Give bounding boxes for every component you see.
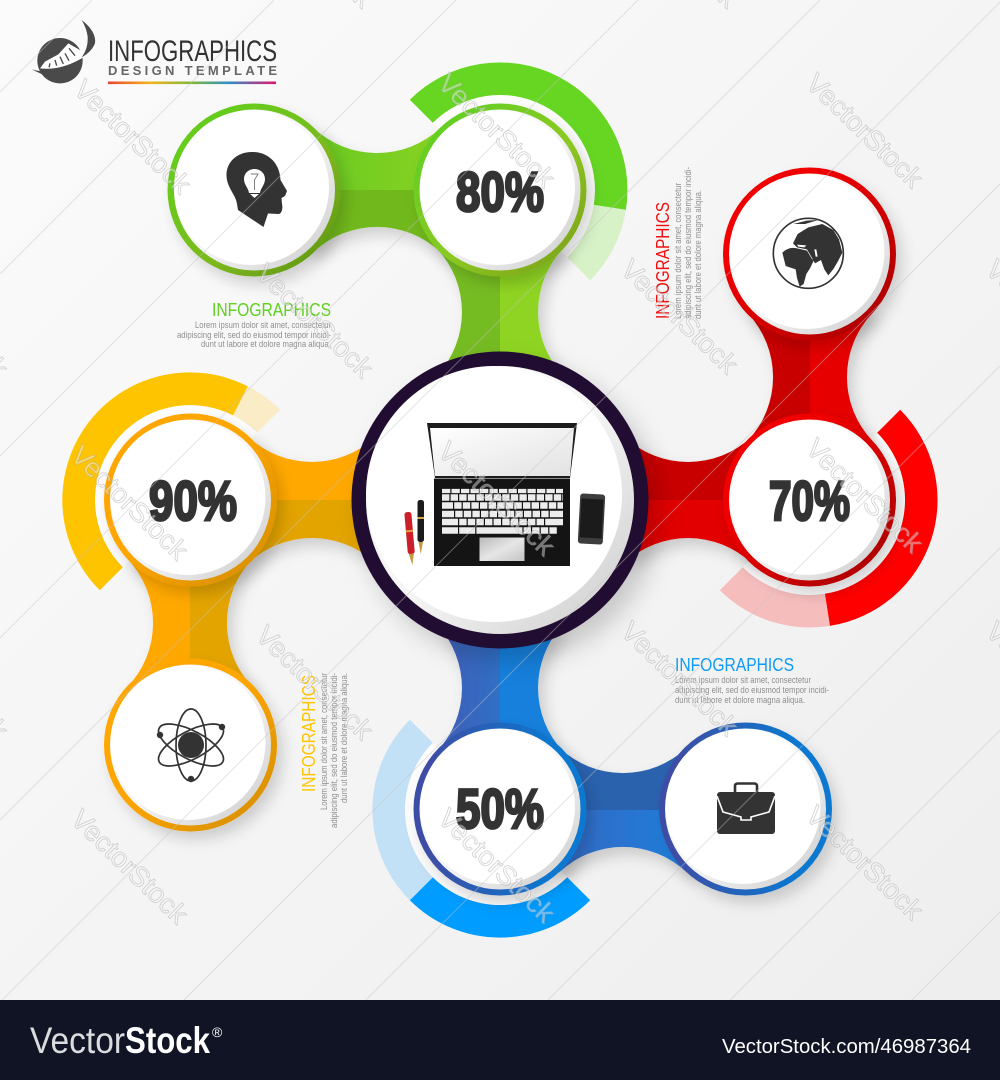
logo (32, 20, 277, 84)
logo mark (32, 20, 95, 83)
node: 50% (414, 722, 586, 896)
label: yellow text block: dunt ut labore et dolore magna aliqua. (339, 673, 349, 803)
value 80%: 80% (456, 160, 544, 223)
value 50%: 50% (456, 777, 544, 840)
icon: black pen (418, 500, 424, 554)
label: green text block: dunt ut labore et dolore magna aliqua. (201, 339, 331, 349)
node: 90% (104, 414, 277, 586)
label: red text block: dunt ut labore et dolore magna aliqua. (693, 190, 703, 319)
node: head icon (168, 104, 340, 276)
connector: blue (437, 625, 746, 872)
watermark overlay: VectorStock (65, 804, 194, 930)
panel: green arm 80% (168, 62, 627, 375)
node: 80% (414, 104, 586, 276)
progress arc 50% (372, 720, 590, 938)
footer bar (0, 1000, 1000, 1080)
watermark overlay: VectorStock (65, 440, 194, 566)
label: green text block: Lorem ipsum dolor sit amet, consectetur (195, 320, 331, 330)
watermark overlay: VectorStock (432, 803, 561, 929)
label: blue text block: INFOGRAPHICS (675, 655, 794, 675)
panel: red arm 70% (625, 167, 938, 627)
node: globe icon (723, 168, 896, 340)
icon: red pen (404, 512, 416, 565)
watermark overlay: VectorStock (800, 68, 929, 194)
watermark overlay: VectorStock (250, 620, 379, 746)
label: green text block: INFOGRAPHICS (212, 300, 331, 320)
connector: yellow (128, 437, 375, 746)
label: red text block: Lorem ipsum dolor sit amet, consectetur (673, 183, 683, 319)
label: red text block (653, 167, 703, 319)
label: yellow text block: INFOGRAPHICS (299, 675, 319, 792)
icon: briefcase (717, 784, 775, 834)
icon: laptop (427, 423, 577, 566)
watermark overlay: VectorStock (250, 258, 379, 384)
label: red text block: adipiscing elit, sed do eiusmod tempor incidi- (683, 167, 693, 319)
label: green text block (177, 300, 331, 349)
label: yellow text block (299, 673, 349, 828)
progress arc 70% (720, 410, 938, 627)
icon: head with light bulb (226, 152, 287, 227)
label: yellow text block: adipiscing elit, sed do eiusmod tempor incidi- (329, 673, 339, 828)
label: blue text block (675, 655, 829, 705)
icon: atom (153, 709, 229, 782)
label: blue text block: Lorem ipsum dolor sit amet, consectetur (675, 675, 811, 685)
label: blue text block: adipiscing elit, sed do eiusmod tempor incidi- (675, 685, 829, 695)
label: green text block: adipiscing elit, sed do eiusmod tempor incidi- (177, 330, 331, 340)
watermark overlay: VectorStock (432, 436, 561, 562)
progress arc 80% (410, 62, 627, 280)
footer brand: VectorStock (30, 1020, 210, 1061)
logo subtitle: DESIGN TEMPLATE (108, 63, 277, 78)
value 70%: 70% (769, 469, 850, 532)
connector: red (625, 254, 872, 563)
watermark overlay: VectorStock (615, 616, 744, 742)
footer url: VectorStock.com/46987364 (722, 1036, 971, 1058)
label: blue text block: dunt ut labore et dolore magna aliqua. (675, 695, 805, 705)
connector: green (254, 128, 563, 375)
node: atom icon (104, 658, 277, 832)
icon: phone (578, 493, 605, 545)
panel: blue arm 50% (372, 625, 832, 938)
progress arc 90% (62, 372, 280, 590)
footer registered mark: ® (212, 1024, 223, 1040)
panel: central hub (352, 352, 648, 648)
value 90%: 90% (149, 469, 237, 532)
logo title: INFOGRAPHICS (108, 35, 277, 68)
logo rainbow bar (108, 82, 276, 84)
watermark overlay: VectorStock (68, 74, 197, 200)
node: 70% (723, 414, 896, 586)
watermark overlay: VectorStock (615, 254, 744, 380)
label: yellow text block: Lorem ipsum dolor sit amet, consectetur (319, 673, 329, 810)
watermark overlay: VectorStock (800, 800, 929, 926)
label: red text block: INFOGRAPHICS (653, 202, 673, 319)
hub disc (352, 352, 648, 648)
node: briefcase icon (659, 722, 832, 896)
panel: yellow arm 90% (62, 372, 375, 832)
watermark overlay: VectorStock (432, 68, 561, 194)
watermark overlay: VectorStock (800, 433, 929, 559)
icon: globe (773, 218, 843, 288)
